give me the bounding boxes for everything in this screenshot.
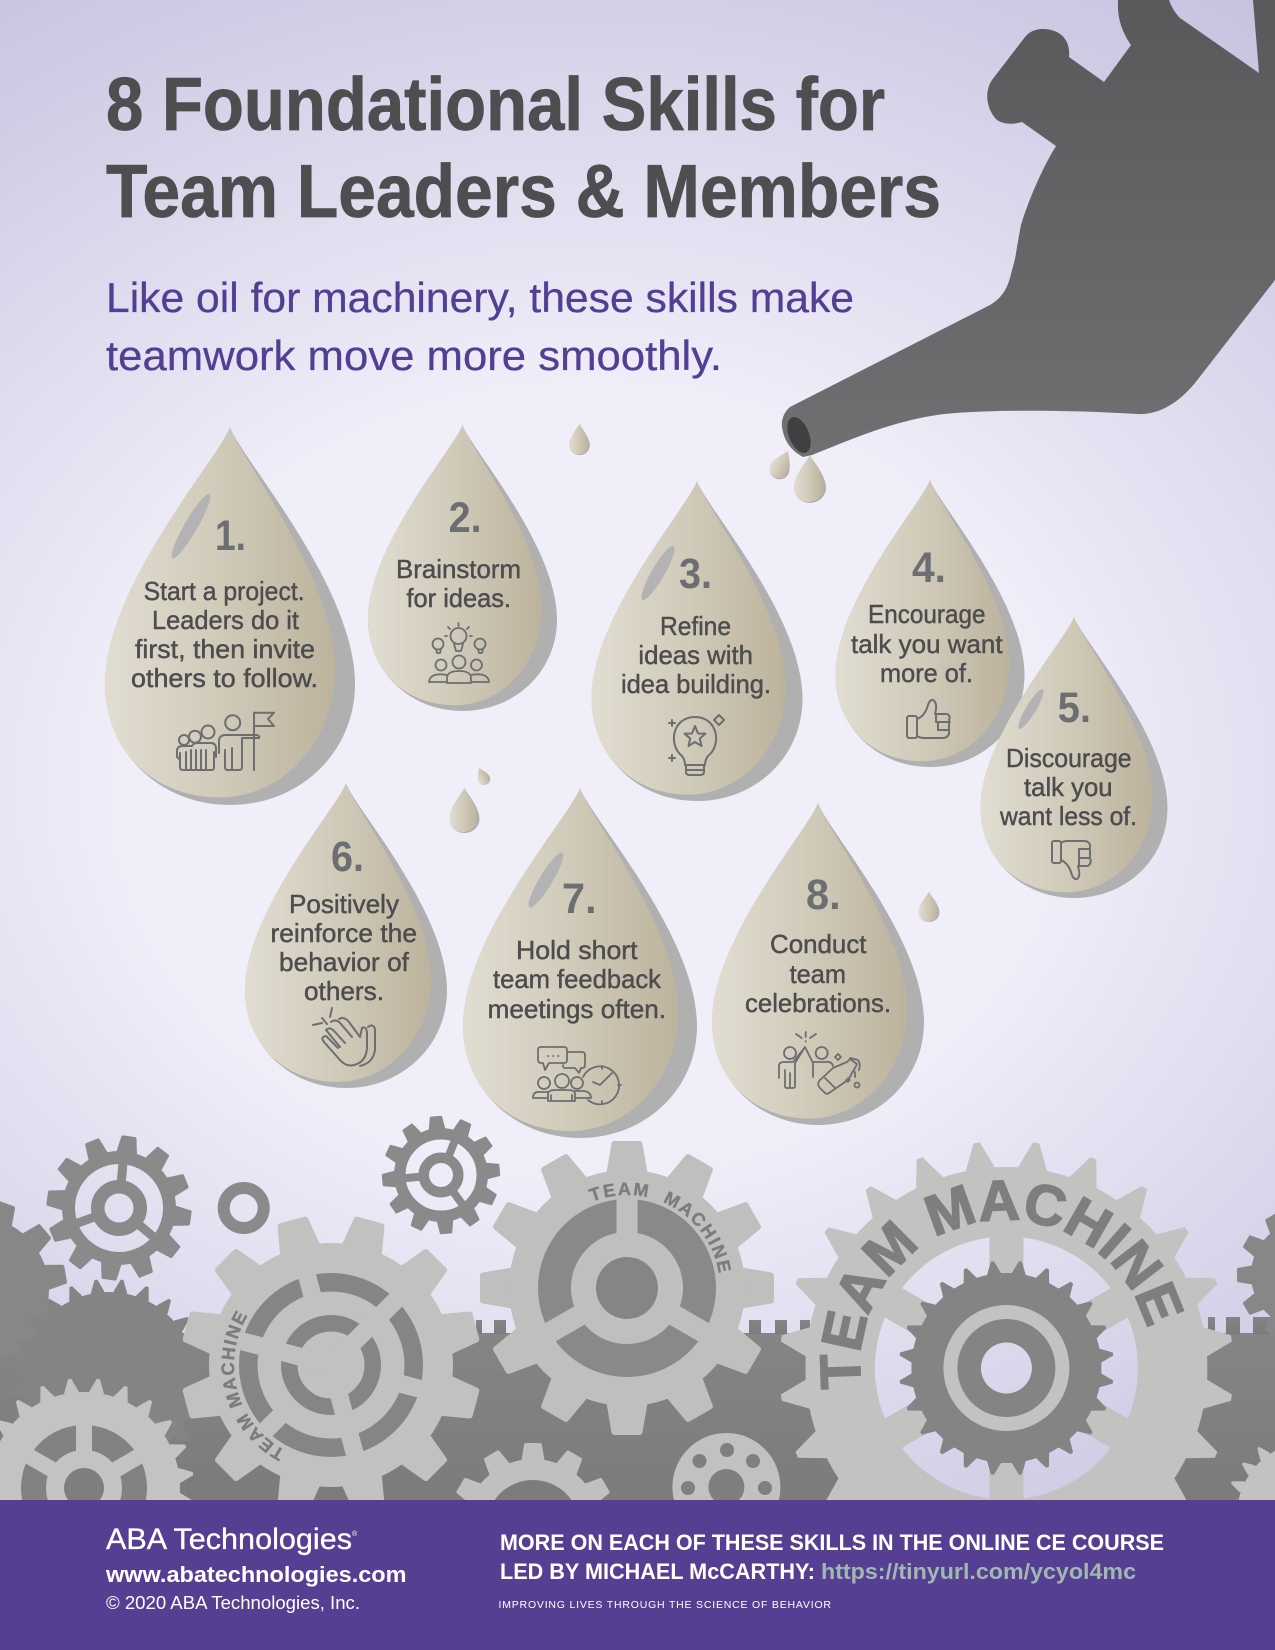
subtitle: Like oil for machinery, these skills make [106, 274, 854, 321]
drop 4: encourage: more of. [880, 658, 973, 688]
gear: dark right edge [1237, 1207, 1275, 1343]
drop 8: celebrations: celebrations. [745, 988, 891, 1018]
drop 2: brainstorm [368, 425, 557, 711]
drop 6: positively reinforce [245, 783, 447, 1088]
icon: high five with champagne [779, 1032, 860, 1094]
icon: thumbs up [907, 700, 950, 738]
drop 1: start a project: first, then invite [135, 634, 315, 664]
footer: course information: LED BY MICHAEL McCARTHY: [500, 1559, 815, 1584]
gear: dark far left [0, 1172, 93, 1408]
footer: course information: IMPROVING LIVES THROUGH THE SCIENCE OF BEHAVIOR [498, 1599, 831, 1611]
drop 5: discourage: want less of. [999, 801, 1137, 831]
drop 3: refine ideas [592, 481, 802, 801]
drop 1: start a project: Start a project. [144, 576, 305, 606]
title: 8 Foundational Skills for [106, 62, 885, 146]
drop 7: team feedback: team feedback [493, 964, 662, 994]
gear: dark small upper left [37, 1126, 201, 1290]
drop 2: brainstorm: for ideas. [406, 583, 511, 613]
drop 1: start a project [105, 427, 355, 805]
drop 4: encourage: talk you want [851, 629, 1003, 659]
gear: large light right with TEAM MACHINE [781, 1142, 1232, 1500]
drop 6: positively reinforce: behavior of [279, 947, 410, 977]
drop 3: refine ideas: 3. [679, 550, 712, 598]
gear: dark inner spiked gear [886, 1247, 1127, 1489]
drop 3: refine ideas: Refine [660, 611, 731, 641]
drop 8: celebrations: Conduct [770, 929, 867, 959]
drop 1: start a project: 1. [215, 512, 246, 560]
gear: large light right with TEAM MACHINE: TEAM MACHINE [820, 1180, 1184, 1390]
icon: speech bubbles, team and clock [533, 1047, 621, 1104]
drop 7: team feedback [463, 788, 697, 1138]
gear: light left with TEAM MACHINE: TEAM MACHINE [221, 1310, 282, 1462]
gear: light disc with holes [672, 1433, 780, 1541]
drop 3: refine ideas: idea building. [621, 669, 771, 699]
gear: light bottom right [1215, 1420, 1275, 1610]
title: Team Leaders & Members [106, 149, 941, 233]
drop 4: encourage: Encourage [868, 599, 986, 629]
icon: team with light bulbs [429, 623, 489, 683]
drop 4: encourage: 4. [912, 544, 946, 592]
drop 7: team feedback: Hold short [516, 935, 638, 965]
gear: dark small ring [224, 1188, 264, 1228]
drop 4: encourage [836, 480, 1024, 767]
icon: watering can [782, 0, 1275, 457]
footer: company info [105, 1523, 406, 1613]
drop 5: discourage: Discourage [1006, 743, 1132, 773]
drop 6: positively reinforce: reinforce the [270, 918, 417, 948]
drop 8: celebrations: 8. [806, 871, 841, 919]
gear: light center with TEAM MACHINE [480, 1141, 774, 1435]
gear: dark small upper center [377, 1111, 505, 1239]
footer: course information: https://tinyurl.com/ycyol4mc [821, 1559, 1136, 1584]
drop 5: discourage [980, 617, 1168, 898]
drop 3: refine ideas: ideas with [638, 640, 753, 670]
footer: course information [498, 1530, 1164, 1611]
footer: company info: ABA Technologies [106, 1523, 352, 1556]
drop 7: team feedback: 7. [562, 875, 597, 923]
drop 8: celebrations: team [790, 959, 846, 989]
gear: light bottom middle [449, 1443, 617, 1611]
drop 2: brainstorm: Brainstorm [396, 554, 521, 584]
drop 2: brainstorm: 2. [449, 494, 482, 542]
gear: light center with TEAM MACHINE: TEAM MACHINE [588, 1182, 732, 1273]
drop 1: start a project: Leaders do it [152, 605, 300, 635]
subtitle: teamwork move more smoothly. [106, 332, 722, 379]
title [106, 62, 941, 233]
footer: company info: ® [352, 1530, 358, 1538]
gear: dark spiked left [0, 1267, 221, 1491]
drop 8: celebrations [712, 803, 924, 1125]
drop 7: team feedback: meetings often. [488, 994, 666, 1024]
footer: company info: © 2020 ABA Technologies, Inc. [106, 1593, 360, 1613]
footer bar [0, 1500, 1275, 1650]
small drops [450, 424, 940, 922]
drop 5: discourage: talk you [1024, 772, 1113, 802]
icon: leader with flag and followers [177, 713, 274, 770]
drop 6: positively reinforce: others. [304, 976, 384, 1006]
icon: thumbs down [1052, 841, 1091, 879]
icon: light bulb with star [669, 715, 724, 775]
footer: course information: MORE ON EACH OF THESE SKILLS IN THE ONLINE CE COURSE [500, 1530, 1164, 1555]
footer: company info: www.abatechnologies.com [105, 1562, 406, 1587]
drop 5: discourage: 5. [1058, 684, 1091, 732]
gears: dark background band [0, 1317, 1275, 1503]
gear: light bottom left [0, 1365, 207, 1611]
drop 6: positively reinforce: 6. [331, 833, 364, 881]
gear: light left with TEAM MACHINE [182, 1216, 480, 1500]
icon: clapping hands [313, 1008, 375, 1066]
subtitle [106, 274, 854, 379]
drop 6: positively reinforce: Positively [289, 889, 399, 919]
drop 1: start a project: others to follow. [131, 663, 318, 693]
